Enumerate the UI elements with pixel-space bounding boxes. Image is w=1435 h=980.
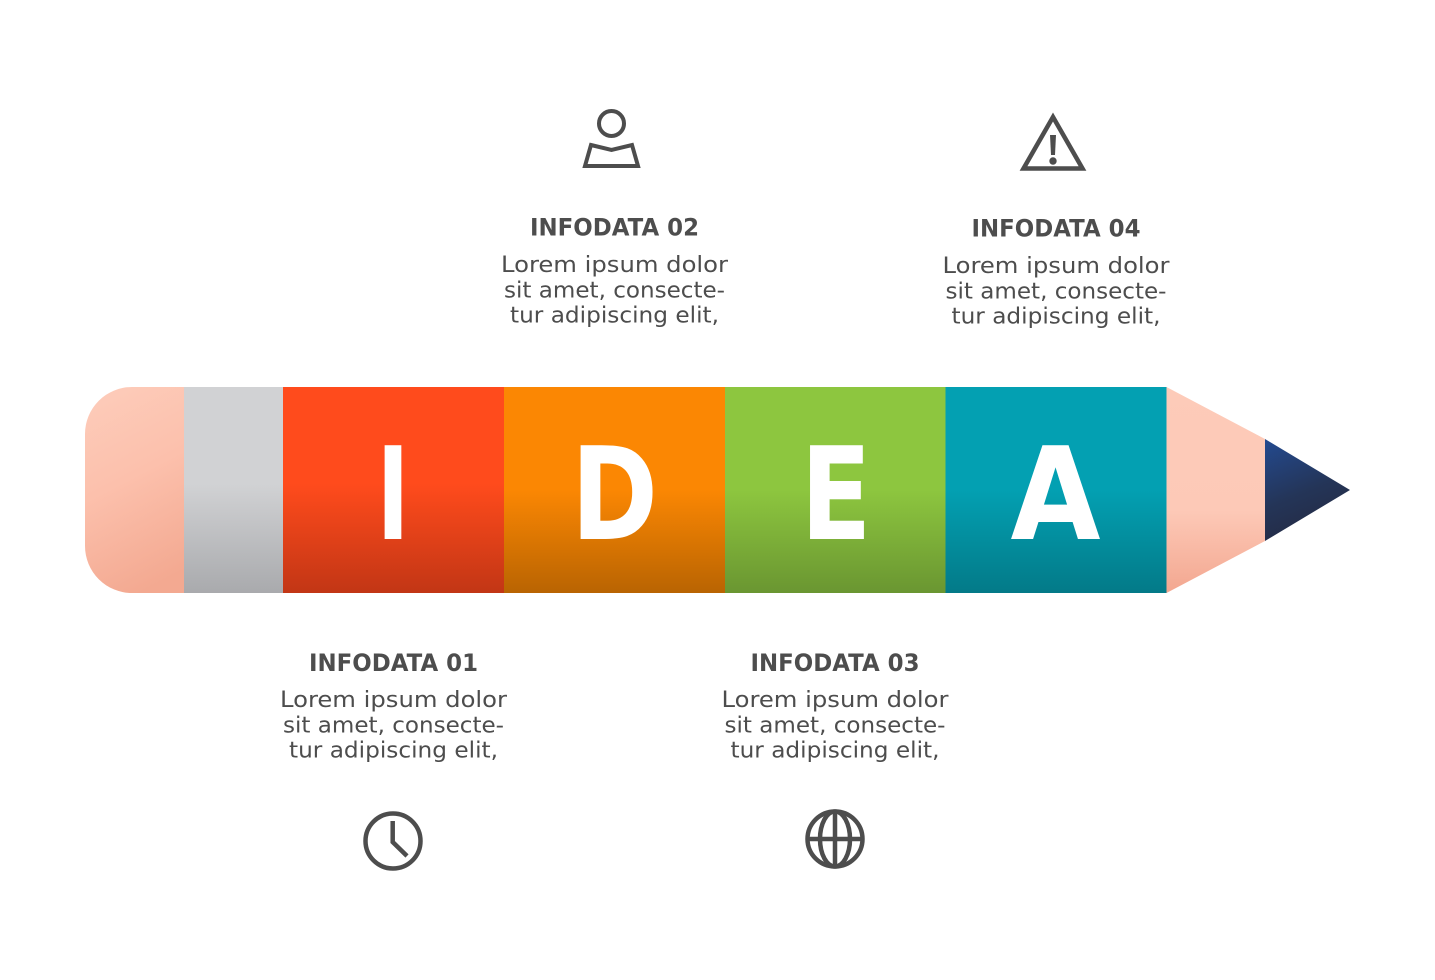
- icon: person on map: [585, 111, 638, 166]
- segment D: [504, 387, 725, 593]
- segment I: I: [376, 421, 410, 570]
- body text 02: Lorem ipsum dolor: [501, 252, 729, 278]
- eraser: [85, 387, 184, 593]
- heading 02: INFODATA 02: [530, 214, 699, 242]
- body text 03: [722, 687, 949, 764]
- segment A: A: [1010, 421, 1100, 570]
- body text 04: [942, 253, 1170, 330]
- body text 03: sit amet, consecte-: [724, 712, 946, 738]
- body text 01: sit amet, consecte-: [283, 712, 504, 738]
- block: infodata 04: [942, 117, 1170, 330]
- body text 01: [280, 687, 508, 764]
- body text 04: tur adipiscing elit,: [952, 304, 1160, 330]
- graphite point: [1265, 439, 1350, 541]
- body text 01: tur adipiscing elit,: [289, 738, 498, 764]
- block: infodata 01: [280, 649, 508, 868]
- heading 04: INFODATA 04: [972, 214, 1140, 242]
- icon: warning triangle: [1024, 117, 1082, 168]
- segment D: D: [571, 421, 658, 570]
- body text 03: tur adipiscing elit,: [730, 738, 940, 764]
- wood tip: [1166, 387, 1265, 593]
- segment E: E: [800, 421, 872, 570]
- segment E: [725, 387, 946, 593]
- pencil: [85, 387, 1350, 593]
- block: infodata 03: [722, 649, 949, 867]
- icon: globe: [807, 811, 863, 867]
- icon: clock: [366, 814, 420, 868]
- metal ferrule: [184, 387, 283, 593]
- body text 04: Lorem ipsum dolor: [942, 253, 1170, 279]
- body text 02: tur adipiscing elit,: [510, 302, 719, 328]
- body text 03: Lorem ipsum dolor: [722, 687, 949, 713]
- body text 02: [501, 252, 729, 328]
- segment A: [946, 387, 1166, 593]
- block: infodata 02: [501, 111, 729, 328]
- body text 04: sit amet, consecte-: [946, 278, 1166, 304]
- heading 03: INFODATA 03: [750, 649, 920, 677]
- segment I: [283, 387, 504, 593]
- body text 02: sit amet, consecte-: [504, 278, 725, 304]
- body text 01: Lorem ipsum dolor: [280, 687, 508, 713]
- heading 01: INFODATA 01: [309, 649, 478, 677]
